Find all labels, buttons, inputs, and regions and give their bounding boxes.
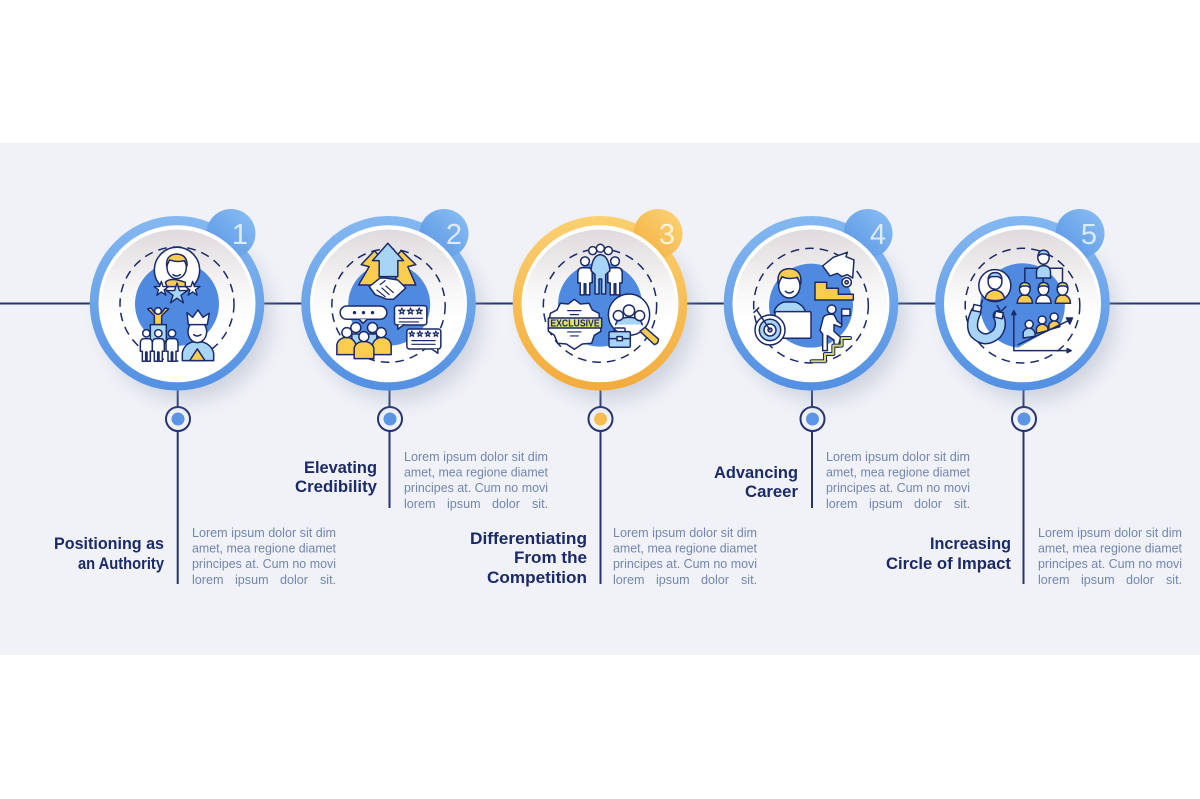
step 1 title (54, 535, 165, 573)
step 2 text: lorem (404, 497, 436, 511)
step 3 text: dolor (701, 573, 729, 587)
step 3 text: lorem (613, 573, 644, 587)
step 1 text: sit. (320, 573, 336, 587)
step 4 text: amet, mea regione diamet (826, 466, 970, 480)
step 2 icon (332, 243, 445, 362)
step 5 connector and node (1012, 385, 1036, 584)
step 4 title: Advancing (714, 464, 798, 482)
step 4 ring (724, 209, 905, 401)
step 3 text: principes at. Cum no movi (613, 557, 757, 571)
step 1 text: lorem (192, 573, 224, 587)
step 5 text: dolor (1126, 573, 1154, 587)
step 1 text: principes at. Cum no movi (192, 557, 336, 571)
step 1 text: Lorem ipsum dolor sit dim (192, 526, 336, 540)
step 4 title (714, 464, 799, 501)
step 2 title: Credibility (295, 478, 378, 496)
step 3 text: ipsum (656, 573, 690, 587)
step 3 text (613, 526, 757, 587)
step 5 text: lorem (1038, 573, 1070, 587)
step 5 ring (935, 209, 1116, 401)
step 4 icon (754, 248, 868, 363)
step 5 icon (965, 248, 1080, 363)
step 2 text: dolor (492, 497, 520, 511)
step 3 ring (513, 209, 694, 401)
step 4 text: Lorem ipsum dolor sit dim (826, 450, 970, 464)
step 2 text: amet, mea regione diamet (404, 466, 548, 480)
step 1 icon (120, 247, 234, 361)
step 2 text (404, 450, 548, 511)
step 4 text: lorem (826, 497, 858, 511)
step 4 text: sit. (954, 497, 970, 511)
step 3 connector and node (588, 385, 612, 584)
step 5 (935, 209, 1116, 584)
step 3 title: From the (514, 549, 587, 567)
step 5 text: sit. (1166, 573, 1182, 587)
step 4 title: Career (745, 483, 799, 501)
step 1 text (192, 526, 336, 587)
step 2 text: ipsum (447, 497, 481, 511)
step 1 ring: 1 (232, 219, 248, 251)
step 3 text: sit. (741, 573, 757, 587)
step 4 text: ipsum (869, 497, 903, 511)
step 3 text: Lorem ipsum dolor sit dim (613, 526, 757, 540)
step 2 title: Elevating (304, 459, 377, 477)
step 3 icon (543, 244, 658, 362)
step 4 (724, 209, 905, 508)
step 1 text: ipsum (235, 573, 269, 587)
step 2 (301, 209, 482, 508)
step 3 title: Competition (487, 569, 587, 587)
step 1 connector and node (166, 385, 190, 584)
step 5 text: ipsum (1081, 573, 1115, 587)
step 4 text: principes at. Cum no movi (826, 481, 970, 495)
step 5 ring: 5 (1081, 219, 1097, 251)
step 3 (513, 209, 694, 584)
horizontal timeline (0, 302, 1200, 304)
step 2 title (295, 459, 378, 496)
step 5 text: amet, mea regione diamet (1038, 542, 1182, 556)
step 3 ring: 3 (659, 219, 675, 251)
step 3 title: Differentiating (470, 530, 587, 548)
step 2 connector and node (378, 385, 402, 508)
step 4 text (826, 450, 970, 511)
step 1 text: dolor (280, 573, 308, 587)
step 5 text (1038, 526, 1182, 587)
step 4 connector and node (800, 385, 824, 508)
step 2 text: sit. (532, 497, 548, 511)
step 2 text: principes at. Cum no movi (404, 481, 548, 495)
step 5 title (886, 535, 1011, 573)
step 5 title: Increasing (930, 535, 1011, 553)
step 5 title: Circle of Impact (886, 555, 1011, 573)
step 3 icon: EXCLUSIVE (550, 319, 600, 330)
step 2 text: Lorem ipsum dolor sit dim (404, 450, 548, 464)
step 1 title: an Authority (78, 555, 165, 573)
step 5 text: principes at. Cum no movi (1038, 557, 1182, 571)
step 4 text: dolor (914, 497, 942, 511)
step 4 ring: 4 (870, 219, 886, 251)
step 2 ring (301, 209, 482, 401)
step 1 title: Positioning as (54, 535, 164, 553)
step 3 title (470, 530, 587, 587)
step 2 ring: 2 (446, 219, 462, 251)
background panel (0, 143, 1200, 655)
step 1 (90, 209, 271, 584)
step 3 text: amet, mea regione diamet (613, 542, 757, 556)
step 1 ring (90, 209, 271, 401)
step 5 text: Lorem ipsum dolor sit dim (1038, 526, 1182, 540)
step 1 text: amet, mea regione diamet (192, 542, 336, 556)
